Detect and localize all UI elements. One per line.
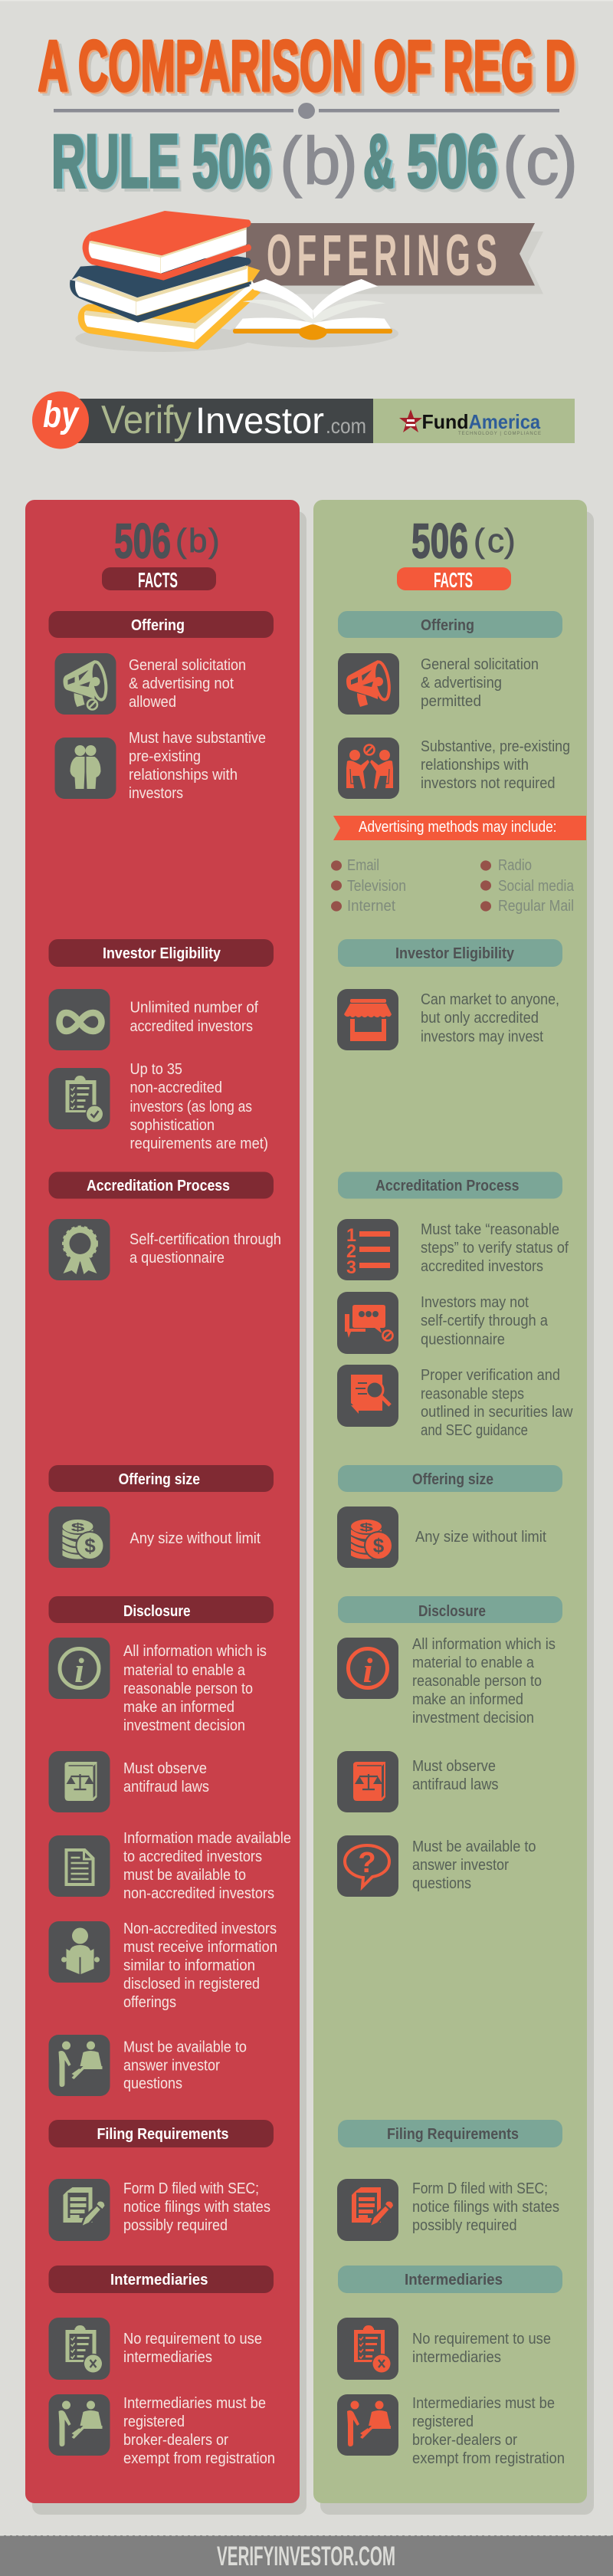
- text: general solicitation: & advertising not: [129, 675, 234, 692]
- text: up to 35 non-accredited: investors (as long as: [130, 1099, 252, 1116]
- text: answer questions: [412, 1838, 536, 1892]
- section heading: Intermediaries: Intermediaries: [405, 2271, 503, 2288]
- text: non-accredited investors: similar to information: [123, 1957, 255, 1974]
- text: proper verification: reasonable steps: [421, 1386, 524, 1403]
- text: all information: material to enable a: [412, 1654, 535, 1671]
- icon: broker at desk: [49, 2394, 110, 2456]
- text: relationships not required: relationships with: [421, 757, 529, 774]
- subtitle: Rule 506(b) & 506(c): &: [366, 122, 397, 206]
- text: may not self-certify: self-certify through a: [421, 1313, 549, 1329]
- text: no requirement: [123, 2331, 262, 2366]
- text: antifraud: Must observe: [123, 1760, 207, 1777]
- VerifyInvestor logotype: Investor: [195, 401, 324, 442]
- text: may not self-certify: [421, 1294, 549, 1348]
- section heading: Accreditation Process: [338, 1171, 562, 1199]
- text: unlimited accredited investors: Unlimited number of: [130, 1000, 258, 1017]
- text: reasonable steps: Must take “reasonable: [421, 1221, 559, 1238]
- text: all information: [123, 1643, 267, 1734]
- section heading: Investor Eligibility: [49, 939, 274, 967]
- icon: megaphone not allowed: [55, 653, 116, 715]
- by badge: by: [43, 395, 80, 435]
- subtitle: Rule 506(b) & 506(c): [51, 119, 578, 206]
- icon: law book: [337, 1751, 398, 1812]
- heading: 506(c): 506: [411, 514, 468, 569]
- text: up to 35 non-accredited: requirements are met): [130, 1135, 268, 1152]
- VerifyInvestor logotype: .com: [326, 414, 366, 438]
- text: form D: [412, 2180, 559, 2234]
- text: proper verification: Proper verification and: [421, 1367, 560, 1384]
- icon: clipboard with check: [49, 1068, 110, 1129]
- by badge: [32, 391, 89, 449]
- section heading: Offering: [49, 611, 274, 638]
- icon: clipboard with x: [49, 2318, 110, 2380]
- section heading: Filing Requirements: Filing Requirements: [387, 2125, 519, 2143]
- text: antifraud: antifraud laws: [123, 1779, 209, 1796]
- text: form D: possibly required: [412, 2217, 516, 2234]
- text: may not self-certify: Investors may not: [421, 1294, 529, 1311]
- heading: 506(c): (c): [474, 522, 516, 560]
- text: general solicitation permitted: permitted: [421, 693, 481, 710]
- text: can market to anyone: investors may invest: [421, 1029, 543, 1046]
- text: up to 35 non-accredited: Up to 35: [130, 1061, 182, 1078]
- VerifyInvestor logotype: [101, 398, 366, 442]
- text: substantive relationships: relationships with: [129, 767, 238, 784]
- icon: rosette: [49, 1219, 110, 1280]
- badge: facts: FACTS: [434, 568, 473, 592]
- illustration: stack of books and open book: [70, 211, 398, 352]
- icon: numbered list: [337, 1219, 398, 1280]
- section heading: Filing Requirements: [49, 2120, 274, 2147]
- text: all information: investment decision: [412, 1710, 534, 1727]
- text: no requirement: intermediaries: [412, 2349, 501, 2366]
- text: can market to anyone: [421, 991, 559, 1046]
- section heading: Intermediaries: [49, 2266, 274, 2293]
- text: substantive relationships: [129, 730, 266, 802]
- subtitle: Rule 506(b) & 506(c): &: [365, 119, 395, 203]
- icon: info: [49, 1638, 110, 1699]
- section heading: Investor Eligibility: Investor Eligibility: [395, 945, 515, 962]
- subtitle: Rule 506(b) & 506(c): 506: [410, 122, 500, 206]
- heading: 506(b): (b): [175, 522, 220, 560]
- text: may not self-certify: questionnaire: [421, 1331, 505, 1348]
- list: advertising methods: Internet: [347, 898, 395, 915]
- text: intermediaries registered: registered: [412, 2413, 474, 2430]
- icon: people at desk: [49, 2035, 110, 2096]
- icon: seated people with stop sign: [338, 738, 399, 799]
- icon: chat bubbles with stop sign: [337, 1292, 398, 1354]
- list: advertising methods: Radio: [498, 857, 532, 874]
- text: answer questions: answer investor: [412, 1857, 509, 1874]
- text: form D: Form D filed with SEC;: [123, 2180, 259, 2197]
- text: answer questions: questions: [412, 1875, 471, 1892]
- list: advertising methods: Regular Mail: [498, 898, 574, 915]
- text: unlimited accredited investors: accredited investors: [130, 1018, 253, 1035]
- text: all information: make an informed: [123, 1699, 234, 1716]
- text: reasonable steps: [421, 1221, 569, 1275]
- text: no requirement: [412, 2331, 551, 2366]
- text: self-certification: [129, 1231, 281, 1267]
- icon: two people embracing: [55, 738, 116, 799]
- section heading: Accreditation Process: [49, 1171, 274, 1199]
- icon: question bubble: [337, 1835, 398, 1897]
- panel: 506(c) facts: [313, 500, 594, 2515]
- text: answer investor questions: questions: [123, 2075, 182, 2092]
- section heading: Intermediaries: [338, 2266, 562, 2293]
- panel: 506(b) facts: [25, 500, 306, 2515]
- icon: document search: [337, 1365, 398, 1427]
- section heading: Filing Requirements: [338, 2120, 562, 2147]
- text: answer investor questions: answer investor: [123, 2058, 220, 2075]
- section heading: Intermediaries: Intermediaries: [110, 2271, 208, 2288]
- section heading: Offering size: [338, 1465, 562, 1492]
- FundAmerica logo: America: [469, 410, 541, 433]
- section heading: Offering: Offering: [131, 616, 185, 634]
- list: advertising methods: Television: [347, 878, 406, 895]
- subtitle: Rule 506(b) & 506(c): (b): [280, 124, 358, 199]
- section heading: Investor Eligibility: [338, 939, 562, 967]
- text: no requirement: intermediaries: [123, 2349, 212, 2366]
- icon: person reading: [49, 1921, 110, 1983]
- icon: form and pen: [337, 2179, 398, 2241]
- text: form D: Form D filed with SEC;: [412, 2180, 548, 2197]
- text: proper verification: [421, 1367, 573, 1439]
- list: advertising methods: Email: [347, 857, 379, 874]
- icon: info: [337, 1638, 398, 1699]
- text: antifraud: [123, 1760, 209, 1796]
- text: self-certification: a questionnaire: [129, 1250, 225, 1267]
- badge: facts: [102, 567, 216, 592]
- text: intermediaries registered: Intermediaries must be: [412, 2395, 555, 2412]
- text: non-accredited investors: offerings: [123, 1994, 176, 2011]
- text: all information: All information which is: [123, 1643, 267, 1660]
- text: substantive relationships: pre-existing: [129, 748, 201, 765]
- text: non-accredited investors: Non-accredited investors: [123, 1921, 277, 1937]
- text: intermediaries registered: Intermediaries must be: [123, 2395, 266, 2412]
- footer: verifyinvestor.com: [0, 2535, 613, 2576]
- text: information made available: must be available to: [123, 1867, 246, 1884]
- text: answer investor questions: Must be available to: [123, 2039, 247, 2056]
- text: antifraud: Must observe: [412, 1758, 496, 1775]
- section heading: Investor Eligibility: Investor Eligibility: [103, 945, 221, 962]
- subtitle: Rule 506(b) & 506(c): 506: [407, 119, 497, 203]
- text: information made available: to accredited investors: [123, 1848, 262, 1865]
- heading: 506(b): 506: [114, 514, 171, 569]
- text: answer investor questions: [123, 2039, 247, 2092]
- text: information made available: non-accredited investors: [123, 1885, 274, 1902]
- text: relationships not required: [421, 738, 570, 792]
- subtitle: Rule 506(b) & 506(c): 506: [408, 119, 499, 203]
- VerifyInvestor logotype: Verify: [101, 398, 192, 442]
- section heading: Disclosure: Disclosure: [123, 1602, 190, 1620]
- text: all information: investment decision: [123, 1717, 245, 1734]
- text: proper verification: and SEC guidance: [421, 1422, 528, 1439]
- text: general solicitation permitted: General solicitation: [421, 656, 539, 673]
- text: form D: notice filings with states: [412, 2199, 559, 2216]
- text: intermediaries registered: [412, 2395, 565, 2467]
- text: information made available: Information made available: [123, 1830, 291, 1847]
- text: up to 35 non-accredited: [130, 1061, 268, 1152]
- section heading: Offering size: [49, 1465, 274, 1492]
- icon: broker at desk: [337, 2394, 398, 2456]
- text: form D: [123, 2180, 270, 2234]
- text: no requirement: No requirement to use: [412, 2331, 551, 2348]
- text: all information: reasonable person to: [123, 1681, 253, 1697]
- section heading: Filing Requirements: Filing Requirements: [97, 2125, 228, 2143]
- icon: store: [337, 989, 398, 1050]
- subtitle: Rule 506(b) & 506(c): (c): [503, 124, 578, 199]
- text: can market to anyone: Can market to anyone,: [421, 991, 559, 1008]
- text: all information: [412, 1636, 556, 1727]
- text: intermediaries registered: exempt from registration: [123, 2450, 275, 2467]
- text: antifraud: [412, 1758, 498, 1793]
- section heading: Offering: Offering: [421, 616, 474, 634]
- sponsor bar: by VerifyInvestor.com and FundAmerica: [32, 391, 575, 449]
- text: relationships not required: investors not required: [421, 775, 555, 792]
- text: form D: possibly required: [123, 2217, 228, 2234]
- text: any size: Any size without limit: [415, 1529, 546, 1546]
- text: general solicitation permitted: [421, 656, 539, 710]
- text: all information: All information which is: [412, 1636, 556, 1653]
- text: general solicitation permitted: & advertising: [421, 675, 502, 692]
- subtitle: Rule 506(b) & 506(c): RULE 506: [54, 122, 274, 206]
- text: proper verification: outlined in securities law: [421, 1404, 573, 1421]
- footer: verifyinvestor.com: VERIFYINVESTOR.COM: [217, 2542, 395, 2571]
- text: can market to anyone: but only accredited: [421, 1010, 539, 1027]
- text: any size: Any size without limit: [130, 1530, 261, 1547]
- icon: law book: [49, 1751, 110, 1812]
- icon: megaphone: [338, 653, 399, 715]
- text: up to 35 non-accredited: non-accredited: [130, 1079, 222, 1096]
- text: non-accredited investors: must receive information: [123, 1939, 277, 1956]
- text: non-accredited investors: [123, 1921, 277, 2011]
- text: answer questions: Must be available to: [412, 1838, 536, 1855]
- text: all information: material to enable a: [123, 1662, 246, 1679]
- section heading: Disclosure: [49, 1596, 274, 1623]
- list: advertising methods: [331, 857, 575, 915]
- text: all information: make an informed: [412, 1691, 523, 1708]
- text: all information: reasonable person to: [412, 1673, 542, 1690]
- ribbon: Offerings: OFFERINGS: [267, 222, 497, 288]
- text: intermediaries registered: [123, 2395, 275, 2467]
- section heading: Accreditation Process: Accreditation Process: [87, 1177, 230, 1194]
- icon: coins: [337, 1506, 398, 1568]
- text: form D: notice filings with states: [123, 2199, 270, 2216]
- section heading: Offering size: Offering size: [119, 1470, 200, 1488]
- subtitle: Rule 506(b) & 506(c): &: [363, 119, 394, 203]
- section heading: Disclosure: Disclosure: [418, 1602, 486, 1620]
- text: reasonable steps: accredited investors: [421, 1258, 543, 1275]
- section heading: Offering: [338, 611, 562, 638]
- subtitle: Rule 506(b) & 506(c): RULE 506: [53, 119, 272, 203]
- FundAmerica logo: [399, 409, 541, 436]
- text: non-accredited investors: disclosed in registered: [123, 1976, 260, 1993]
- text: intermediaries registered: registered: [123, 2413, 185, 2430]
- text: unlimited accredited investors: [130, 1000, 258, 1035]
- icon: infinity: [49, 989, 110, 1050]
- section heading: Accreditation Process: Accreditation Process: [375, 1177, 520, 1194]
- text: intermediaries registered: broker-dealers or: [412, 2432, 517, 2449]
- text: substantive relationships: investors: [129, 785, 183, 802]
- text: general solicitation: [129, 657, 246, 711]
- subtitle: Rule 506(b) & 506(c): RULE 506: [51, 119, 270, 203]
- text: general solicitation: General solicitation: [129, 657, 246, 674]
- text: reasonable steps: steps” to verify status of: [421, 1240, 569, 1257]
- text: self-certification: Self-certification through: [129, 1231, 281, 1248]
- text: substantive relationships: Must have substantive: [129, 730, 266, 747]
- text: intermediaries registered: broker-dealers or: [123, 2432, 228, 2449]
- icon: document: [49, 1835, 110, 1897]
- section heading: Disclosure: [338, 1596, 562, 1623]
- badge: facts: [397, 567, 511, 592]
- text: general solicitation: allowed: [129, 694, 176, 711]
- text: up to 35 non-accredited: sophistication: [130, 1117, 215, 1134]
- text: intermediaries registered: exempt from registration: [412, 2450, 565, 2467]
- icon: coins: [49, 1506, 110, 1568]
- section heading: Offering size: Offering size: [412, 1470, 493, 1488]
- badge: facts: FACTS: [138, 568, 178, 592]
- FundAmerica logo: TECHNOLOGY | COMPLIANCE: [458, 432, 541, 436]
- text: no requirement: No requirement to use: [123, 2331, 262, 2348]
- icon: form and pen: [49, 2179, 110, 2241]
- text: information made available: [123, 1830, 291, 1902]
- list: advertising methods: Social media: [498, 878, 575, 895]
- text: relationships not required: Substantive, pre-existing: [421, 738, 570, 755]
- ribbon: advertising methods: [333, 816, 586, 840]
- ribbon: advertising methods: Advertising methods may include:: [359, 819, 556, 836]
- text: antifraud: antifraud laws: [412, 1776, 498, 1793]
- FundAmerica logo: Fund: [421, 410, 469, 433]
- title divider: [54, 103, 559, 119]
- icon: clipboard with x: [337, 2318, 398, 2380]
